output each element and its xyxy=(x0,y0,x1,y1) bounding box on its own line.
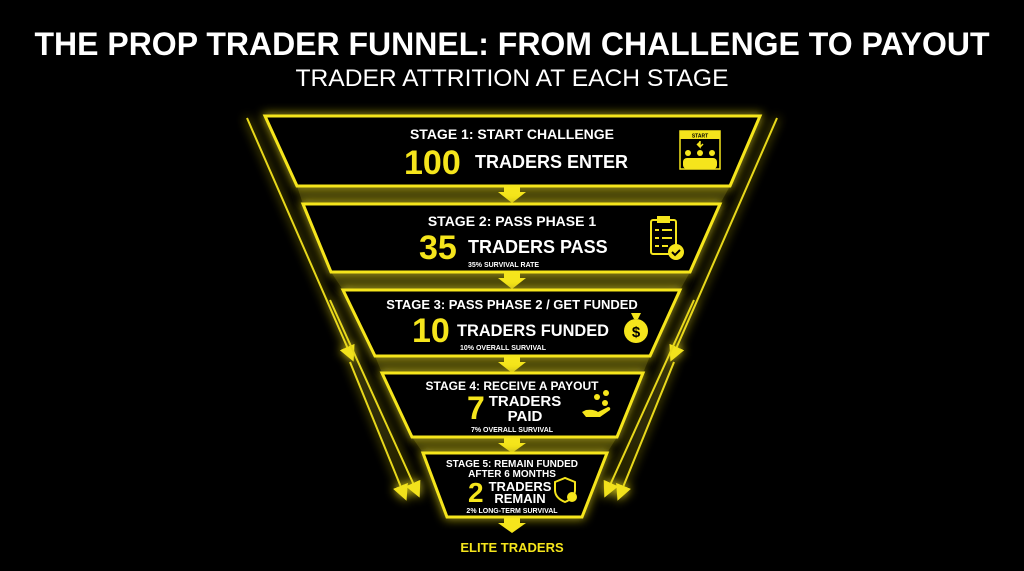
funnel glow connectors xyxy=(297,186,730,453)
stage 2 panel: 35 xyxy=(419,229,457,267)
stage 3 panel: 10% OVERALL SURVIVAL xyxy=(460,345,547,352)
stage 4 panel: STAGE 4: RECEIVE A PAYOUT xyxy=(426,379,599,393)
stage 2 panel: 35% SURVIVAL RATE xyxy=(468,262,539,269)
stage 1 panel xyxy=(265,116,760,186)
icon: start crowd xyxy=(680,131,720,169)
stage 1 panel: STAGE 1: START CHALLENGE xyxy=(410,126,614,142)
stage 2 panel: STAGE 2: PASS PHASE 1 xyxy=(428,213,596,229)
stage 4 panel: PAID xyxy=(508,408,543,425)
icon: shield clock xyxy=(555,478,577,502)
icon: hand with coins xyxy=(582,390,610,417)
stage 2 panel xyxy=(303,204,720,272)
stage 4 panel xyxy=(382,373,643,437)
arrow 4 xyxy=(498,437,526,453)
stage 5 panel: TRADERS xyxy=(489,479,552,494)
stage 5 panel xyxy=(423,453,607,517)
icon: money bag: $ xyxy=(632,324,641,341)
title: THE PROP TRADER FUNNEL: FROM CHALLENGE TO PAYOUT xyxy=(34,26,990,62)
stage 4 panel: 7 xyxy=(467,390,485,426)
arrow 3 xyxy=(498,356,526,373)
stage 5 panel: AFTER 6 MONTHS xyxy=(468,469,556,480)
stage 5 panel: 2 xyxy=(468,477,484,508)
icon: money bag xyxy=(624,313,648,343)
icon: clipboard xyxy=(651,217,683,259)
side arrows xyxy=(247,118,777,497)
elite label: ELITE TRADERS xyxy=(460,540,564,555)
stage 4 panel: TRADERS xyxy=(489,393,561,410)
stage 1 panel: 100 xyxy=(404,144,461,182)
stage 3 panel: 10 xyxy=(412,312,450,350)
stage 4 panel: 7% OVERALL SURVIVAL xyxy=(471,427,554,434)
stage 1 panel: TRADERS ENTER xyxy=(475,152,628,172)
stage 3 panel: TRADERS FUNDED xyxy=(457,321,609,340)
stage 3 panel xyxy=(343,290,680,356)
arrow 2 xyxy=(498,272,526,289)
stage 3 panel: STAGE 3: PASS PHASE 2 / GET FUNDED xyxy=(386,297,638,312)
icon: start crowd: START xyxy=(692,134,708,140)
arrow 5 xyxy=(498,517,526,533)
stage 2 panel: TRADERS PASS xyxy=(468,237,608,257)
stage 5 panel: STAGE 5: REMAIN FUNDED xyxy=(446,459,578,470)
stage 5 panel: 2% LONG-TERM SURVIVAL xyxy=(466,508,558,515)
arrow 1 xyxy=(498,186,526,203)
subtitle: TRADER ATTRITION AT EACH STAGE xyxy=(296,65,728,92)
stage 5 panel: REMAIN xyxy=(494,491,546,506)
